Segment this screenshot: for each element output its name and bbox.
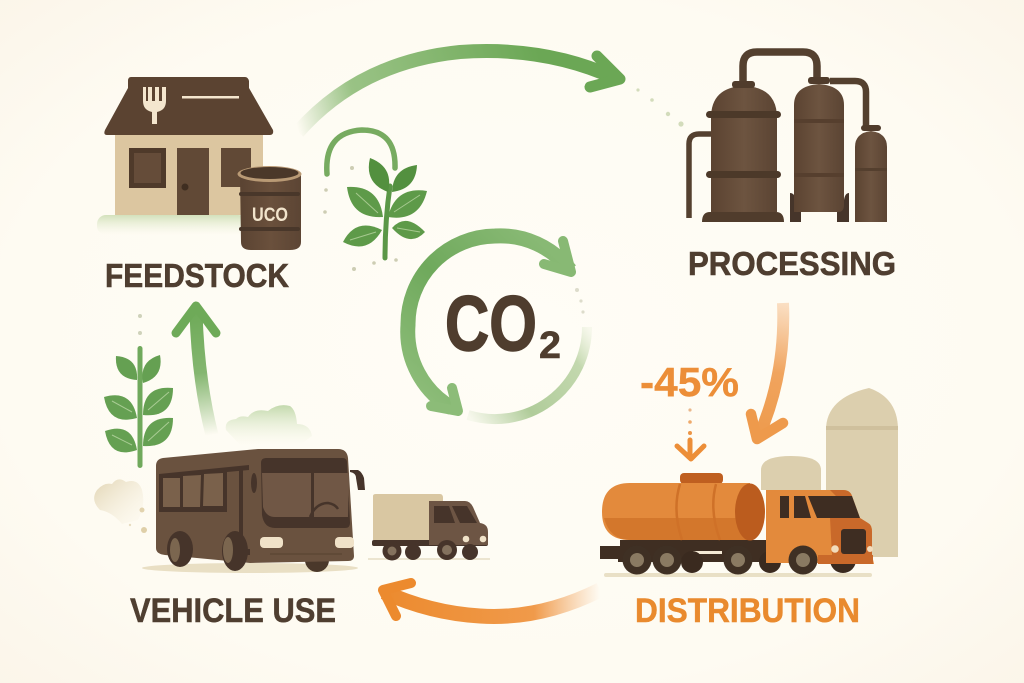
ground line (604, 573, 872, 577)
label: feedstock: FEEDSTOCK (105, 257, 289, 294)
arrow: distribution to vehicle use (383, 583, 600, 616)
ground shadow (97, 215, 247, 235)
panel: distribution (600, 359, 898, 630)
arrow: processing to distribution (751, 303, 783, 439)
callout: -45%: -45% (640, 359, 739, 405)
panel: feedstock (97, 77, 302, 294)
panel: central plant (323, 130, 427, 271)
ground shadow (142, 563, 358, 573)
label: CO2: CO (445, 279, 537, 367)
ring arrow (408, 236, 587, 419)
dots (323, 166, 398, 271)
icon: pipes (689, 52, 866, 218)
icon: distillation towers (702, 77, 887, 222)
label: processing: PROCESSING (688, 245, 896, 282)
label: vehicle use: VEHICLE USE (130, 592, 336, 630)
icon: leafy stalk (104, 346, 173, 468)
icon: storage silos (761, 388, 898, 557)
icon: UCO barrel (238, 166, 302, 250)
icon: restaurant building (104, 77, 273, 215)
cloud: green exhaust (226, 405, 312, 445)
CO2 cycle: 2 (539, 325, 561, 367)
icon: dotted arrow (677, 408, 704, 459)
icon: bus (156, 449, 365, 572)
CO2 cycle (408, 236, 587, 419)
cloud: beige exhaust (94, 479, 147, 533)
arrow: vehicle use to feedstock (176, 306, 216, 435)
panel: processing (688, 52, 896, 282)
dots (138, 314, 142, 335)
icon: delivery truck (368, 494, 490, 560)
icon: UCO barrel: UCO (252, 205, 288, 226)
label: distribution: DISTRIBUTION (635, 592, 860, 630)
dots beside processing (636, 88, 684, 127)
small arc (327, 130, 395, 174)
icon: tanker truck (600, 473, 874, 574)
icon: plant (343, 158, 427, 258)
panel: vehicle use (94, 306, 490, 630)
arrow: feedstock to processing (298, 51, 620, 132)
